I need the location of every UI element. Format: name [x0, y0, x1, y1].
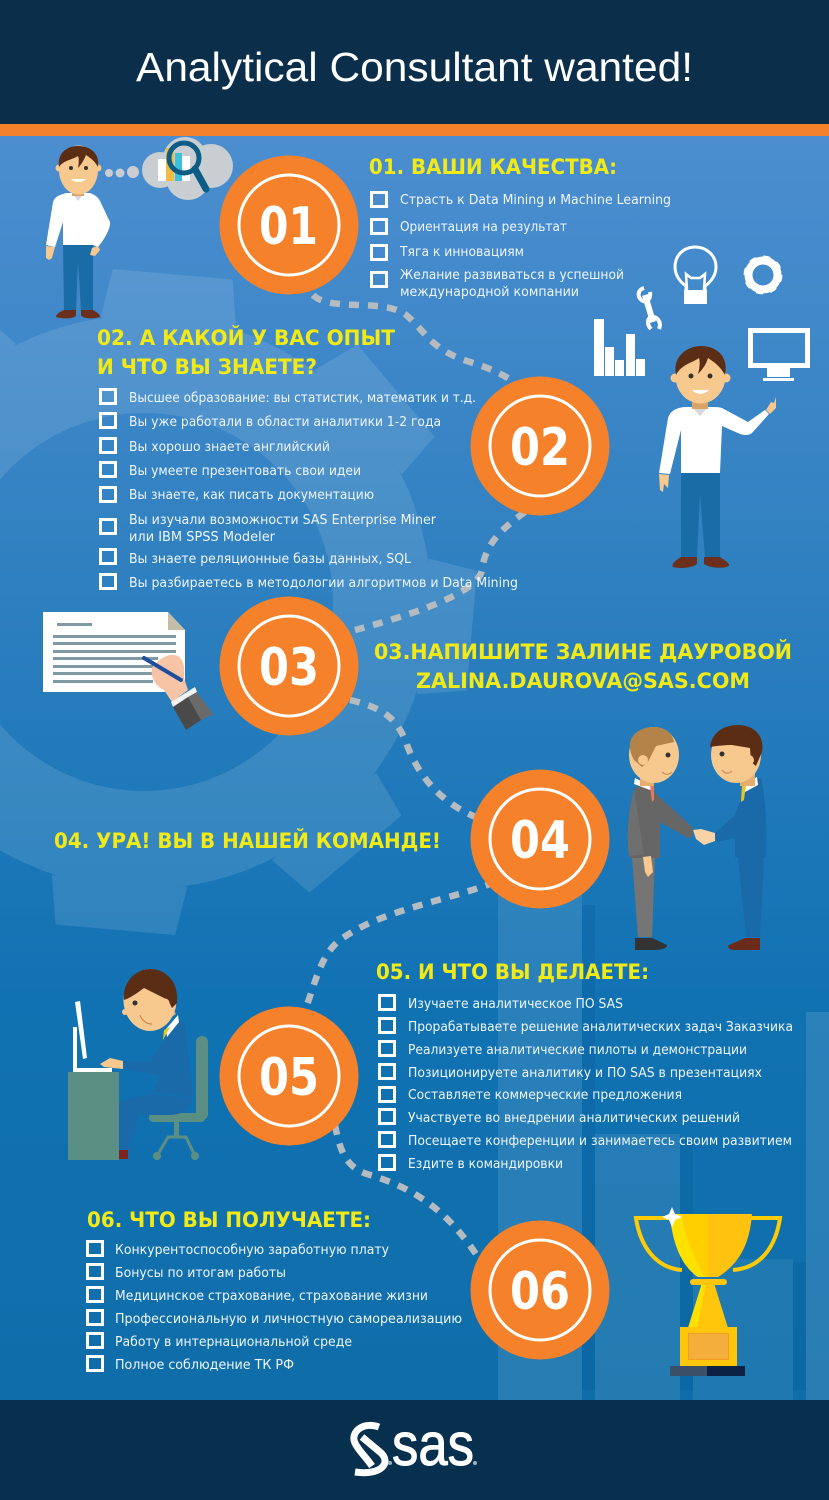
orange stripe [0, 124, 829, 136]
title: Analytical Consultant wanted! [136, 44, 693, 90]
badge 05: 05 [259, 1048, 319, 1108]
heading 02: 02. А КАКОЙ У ВАС ОПЫТ [97, 325, 396, 350]
heading 03 contact: 03.НАПИШИТЕ ЗАЛИНЕ ДАУРОВОЙ [374, 639, 792, 664]
checklist 05: Ездите в командировки [408, 1157, 563, 1172]
checklist 01: международной компании [400, 285, 579, 300]
badge 05 [220, 1006, 358, 1146]
checklist 06: Полное соблюдение ТК РФ [115, 1358, 294, 1373]
man in grey suit [628, 727, 693, 950]
icon: gear [746, 258, 780, 292]
man in blue suit [710, 725, 766, 950]
computer [73, 1001, 112, 1072]
badge 04: 04 [510, 811, 570, 871]
handles [636, 1218, 780, 1270]
checklist 06 [88, 1242, 462, 1373]
badge 03 [220, 596, 358, 736]
foot [670, 1366, 708, 1376]
heading 04: 04. УРА! ВЫ В НАШЕЙ КОМАНДЕ! [54, 828, 441, 853]
panel: section 06 benefits [87, 1208, 462, 1373]
background gear [0, 268, 478, 936]
illustration: document and writing hand [43, 612, 213, 730]
heading 03 contact: ZALINA.DAUROVA@SAS.COM [416, 669, 750, 693]
badge 01 [220, 156, 358, 294]
sparkle [662, 1207, 682, 1227]
heading 02 [97, 325, 396, 379]
seated man [100, 969, 193, 1159]
checklist 05: Участвуете во внедрении аналитических решений [408, 1111, 740, 1126]
cup bowl [670, 1214, 752, 1277]
panel: section 02 experience [97, 325, 518, 591]
plate [688, 1334, 728, 1360]
icon: wrench [639, 288, 660, 329]
collar [690, 1279, 727, 1285]
checklist 05: Посещаете конференции и занимаетесь своим развитием [408, 1134, 792, 1149]
checklist 01: Ориентация на результат [400, 220, 567, 235]
man standing [46, 146, 110, 318]
handshake hands [693, 829, 715, 845]
chair [149, 1036, 208, 1160]
badge 03: 03 [259, 638, 319, 698]
illustration: man presenting with icons [594, 247, 808, 568]
badge 02: 02 [510, 418, 570, 478]
checklist 01: Тяга к инновациям [399, 245, 524, 260]
icon: bar chart [594, 319, 645, 376]
checklist 02 [100, 390, 518, 591]
illustration: trophy [636, 1207, 780, 1376]
checklist 01: Страсть к Data Mining и Machine Learning [400, 193, 671, 208]
icon: monitor [750, 330, 808, 381]
illustration: handshake [628, 725, 766, 950]
heading 02: И ЧТО ВЫ ЗНАЕТЕ? [97, 355, 317, 379]
heading 01: 01. ВАШИ КАЧЕСТВА: [369, 155, 617, 179]
checklist 02: Высшее образование: вы статистик, математик и т.д. [129, 391, 476, 406]
checklist 06: Медицинское страхование, страхование жизни [115, 1289, 428, 1304]
checklist 02: Вы разбираетесь в методологии алгоритмов и Data Mining [129, 576, 518, 591]
illustration: man with thought cloud [46, 137, 233, 318]
checklist 02: Вы знаете, как писать документацию [129, 488, 374, 503]
panel: section 01 qualities [369, 155, 671, 300]
illustration: man at computer [68, 969, 208, 1160]
dotted connectors [305, 295, 525, 1257]
man presenting [659, 346, 776, 568]
checklist 01 [372, 192, 671, 300]
checklist 05: Прорабатываете решение аналитических задач Заказчика [408, 1020, 793, 1035]
thought cloud [105, 137, 233, 200]
badge 02 [470, 376, 610, 516]
checklist 02: Вы умеете презентовать свои идеи [129, 464, 361, 479]
badge 01: 01 [259, 197, 318, 257]
icon: light bulb [675, 247, 716, 304]
badge 06: 06 [510, 1262, 570, 1322]
checklist 02: Вы изучали возможности SAS Enterprise Miner [129, 513, 437, 528]
checklist 02: Вы уже работали в области аналитики 1-2 года [129, 415, 441, 430]
checklist 02: Вы хорошо знаете английский [129, 440, 330, 455]
checklist 06: Конкурентоспособную заработную плату [115, 1243, 389, 1258]
checklist 06: Бонусы по итогам работы [115, 1266, 286, 1281]
checklist 05: Реализуете аналитические пилоты и демонстрации [408, 1043, 747, 1058]
checklist 05: Изучаете аналитическое ПО SAS [408, 997, 623, 1012]
background bar chart [498, 885, 829, 1400]
SAS logo [354, 1411, 477, 1478]
desk [68, 1072, 119, 1160]
panel: section 05 duties [376, 960, 793, 1172]
checklist 02: Вы знаете реляционные базы данных, SQL [129, 552, 412, 567]
header band [0, 0, 829, 124]
footer band [0, 1400, 829, 1500]
heading 03 contact [374, 639, 792, 693]
base [680, 1327, 737, 1366]
checklist 05 [380, 996, 793, 1172]
badge 04 [470, 770, 610, 908]
badge 06 [470, 1220, 610, 1360]
checklist 06: Профессиональную и личностную самореализацию [115, 1312, 462, 1327]
checklist 01: Желание развиваться в успешной [400, 268, 624, 283]
checklist 06: Работу в интернациональной среде [115, 1335, 352, 1350]
heading 06: 06. ЧТО ВЫ ПОЛУЧАЕТЕ: [87, 1208, 371, 1232]
heading 05: 05. И ЧТО ВЫ ДЕЛАЕТЕ: [376, 960, 649, 984]
checklist 02: или IBM SPSS Modeler [129, 530, 276, 545]
SAS logo: sas [392, 1411, 474, 1478]
stem [688, 1283, 728, 1328]
checklist 05: Составляете коммерческие предложения [408, 1088, 682, 1103]
checklist 05: Позиционируете аналитику и ПО SAS в презентациях [408, 1066, 762, 1081]
